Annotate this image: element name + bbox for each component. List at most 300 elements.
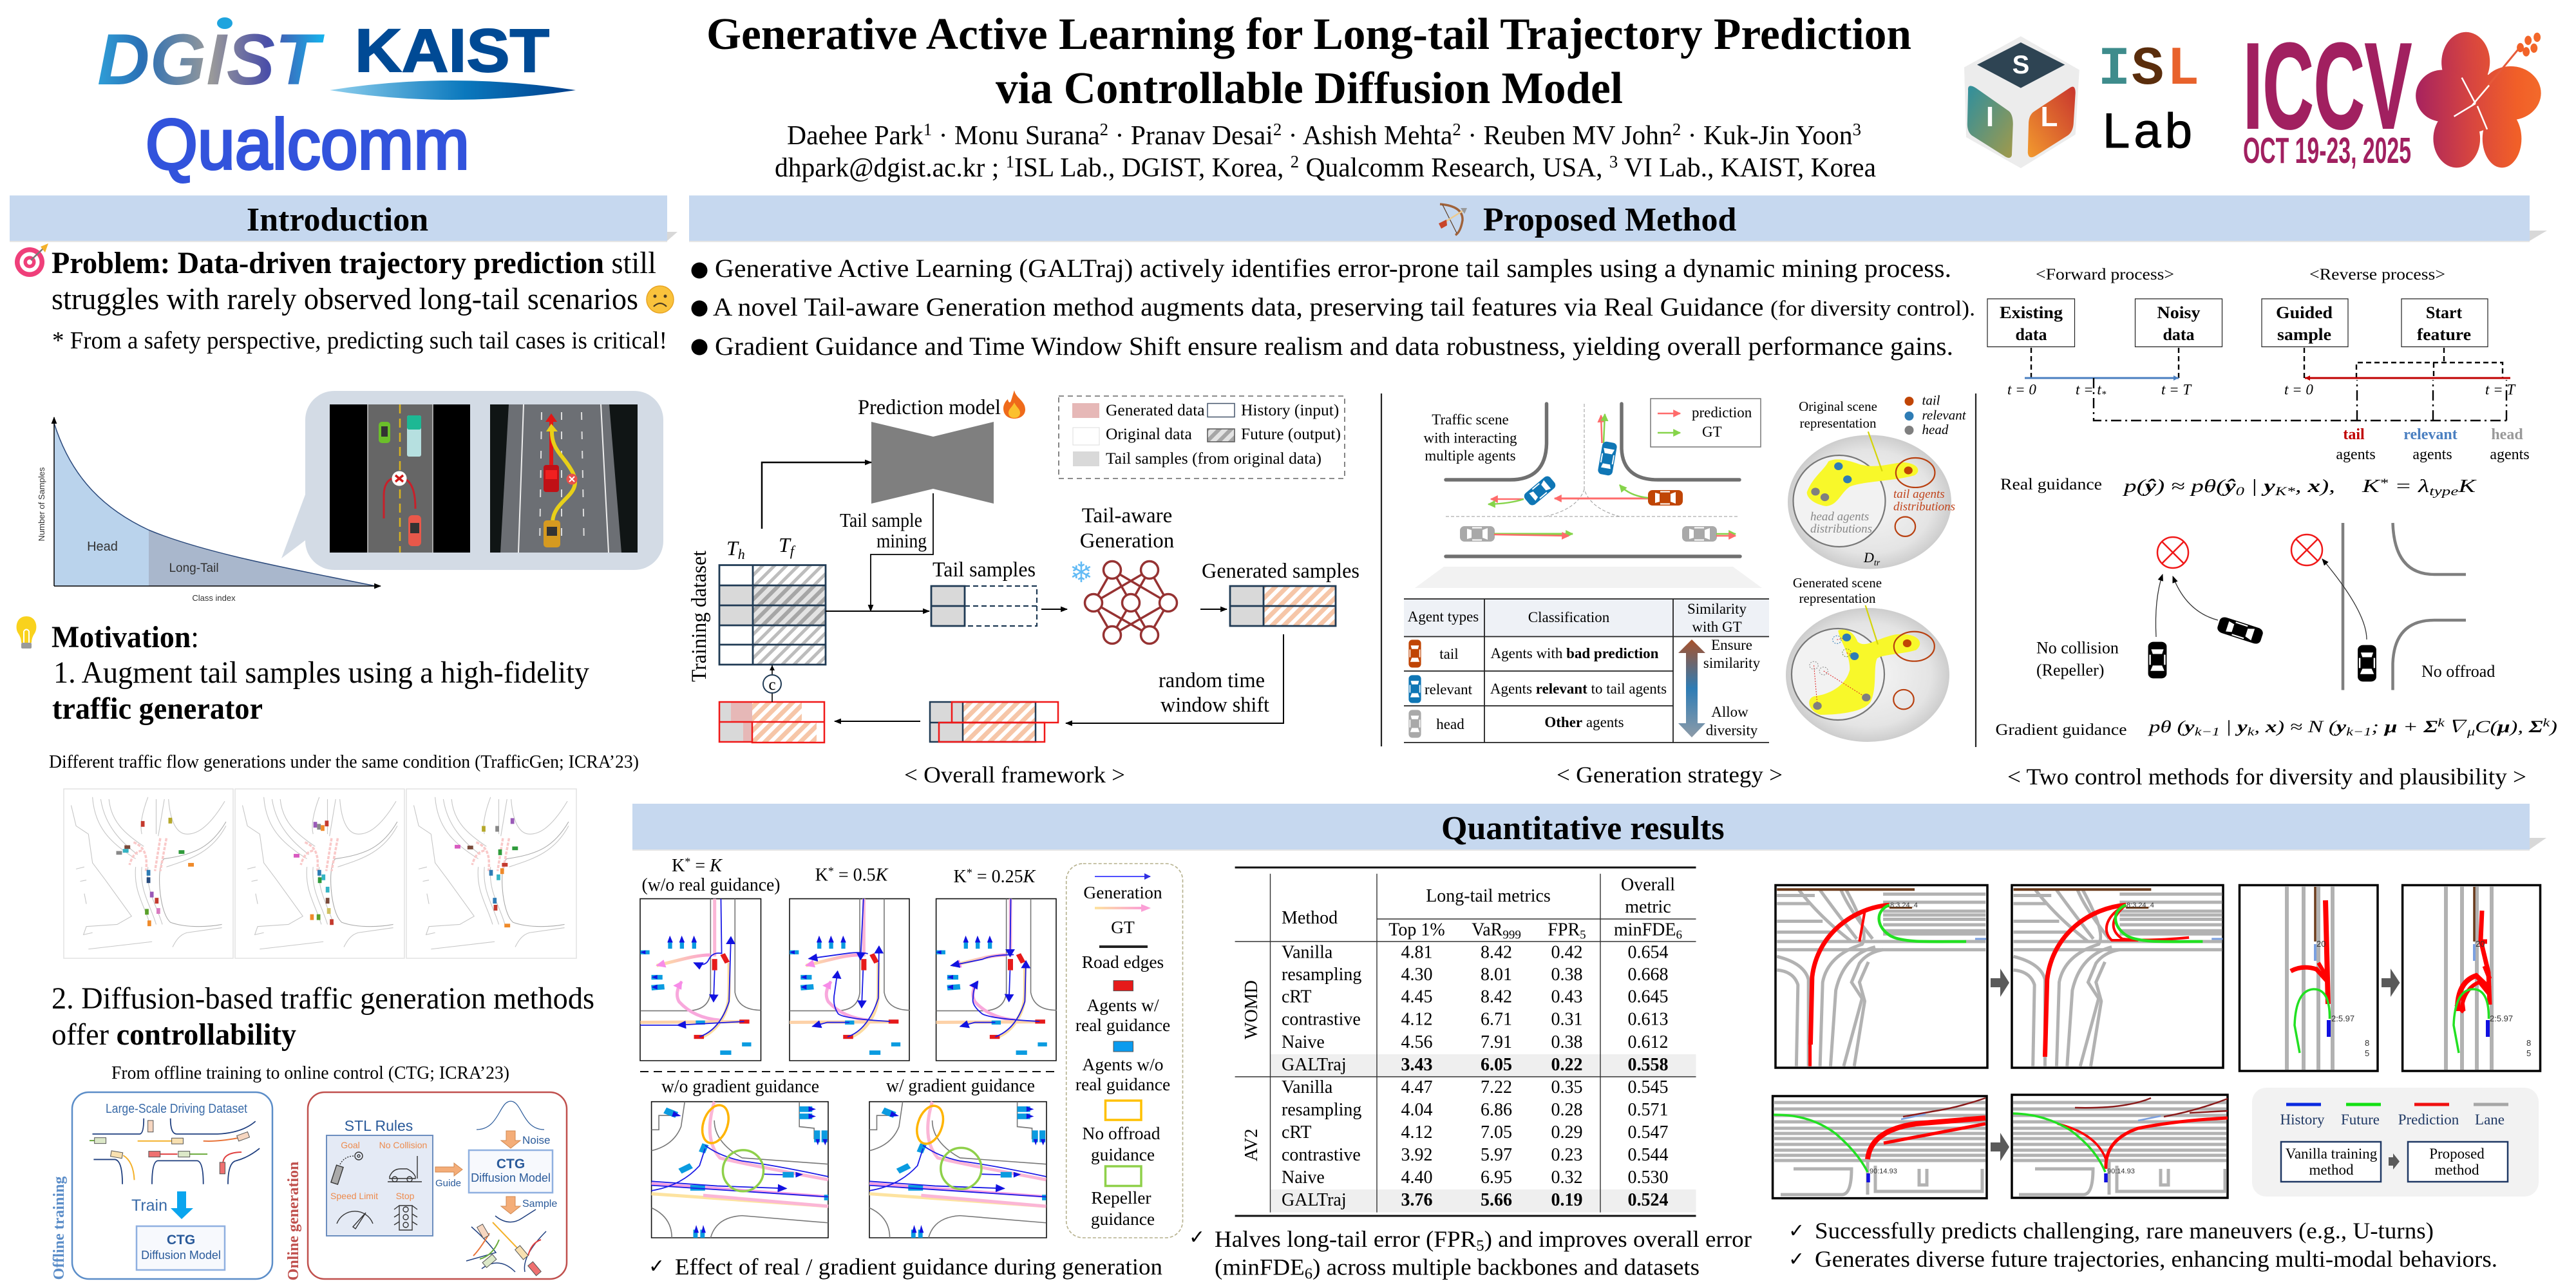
legend: prediction and GT <box>1651 399 1761 447</box>
scene representation: original: D <box>1864 549 1874 565</box>
icon: snowflake: ❄ <box>1070 556 1093 589</box>
legend: trajectory colours: Future <box>2341 1112 2380 1128</box>
table: agent types: Agent types <box>1408 609 1479 625</box>
forward and reverse process: Existing <box>2000 303 2063 322</box>
panel: scenario C vanilla <box>1773 1096 1987 1198</box>
table: quantitative metrics: 7.22 <box>1481 1077 1512 1097</box>
authors: · Pranav Desai <box>1108 121 1273 151</box>
panel: quantitative results <box>632 804 2546 1283</box>
table: quantitative metrics: 6.86 <box>1481 1100 1512 1120</box>
note: table summary: 6 <box>1305 1266 1312 1283</box>
real guidance: x), <box>2308 477 2331 497</box>
concatenated samples: c <box>768 676 776 694</box>
table: quantitative metrics: 0.32 <box>1551 1168 1583 1188</box>
table: quantitative metrics: 3.43 <box>1401 1055 1432 1075</box>
table: quantitative metrics: 4.47 <box>1401 1077 1432 1097</box>
legend: guidance figure: Repeller <box>1091 1188 1151 1208</box>
chart: long-tail distribution: Number of Samples <box>37 467 46 541</box>
legend: guidance figure: guidance <box>1091 1209 1155 1229</box>
table: quantitative metrics: 0.28 <box>1551 1100 1583 1120</box>
table: quantitative metrics: Overall <box>1621 875 1675 895</box>
table: agent types: Classification <box>1528 609 1610 625</box>
authors: 3 <box>1853 120 1861 139</box>
panel: scenario A vanilla <box>1776 885 1987 1068</box>
table: quantitative metrics: resampling <box>1282 1100 1361 1120</box>
summary bullets: Gradient Guidance and Time Window Shift ensure realism and data robustness, yielding overall performance gains. <box>715 332 1953 361</box>
authors: · Reuben MV John <box>1461 121 1672 151</box>
arrow: generator to generated samples <box>1200 609 1227 610</box>
figure: real guidance comparison: K <box>875 866 889 885</box>
table: quantitative metrics: 3.92 <box>1401 1145 1432 1165</box>
figure: real guidance comparison: w/ gradient guidance <box>886 1076 1035 1096</box>
forward and reverse process: t = 0 <box>2007 381 2036 398</box>
panel: scenario A proposed <box>2012 885 2223 1068</box>
table: agent types: Other agents <box>1544 714 1624 730</box>
table: quantitative metrics: 0.645 <box>1628 987 1668 1007</box>
arrow: random time window shift <box>1066 634 1283 723</box>
prediction model <box>858 396 1001 504</box>
legend: prediction and GT: GT <box>1702 424 1722 440</box>
diagram: online generation: Diffusion Model <box>471 1171 551 1184</box>
tail-aware generation network <box>1080 504 1177 644</box>
logo: ISL Lab: I <box>1986 101 1994 133</box>
forward and reverse process: tail <box>2343 426 2365 443</box>
panel: scenario B vanilla: 5 <box>2365 1048 2369 1058</box>
chart: long-tail distribution: Head <box>87 540 118 554</box>
training dataset table: h <box>738 546 745 562</box>
legend: trajectory colours: Vanilla training <box>2286 1146 2378 1162</box>
forward and reverse process: Start <box>2426 303 2462 322</box>
table: agent types: relevant <box>1425 681 1473 697</box>
summary bullets <box>692 254 1975 361</box>
table: quantitative metrics: contrastive <box>1282 1145 1361 1165</box>
panel: with gradient guidance <box>869 1102 1046 1238</box>
training dataset table: T <box>779 533 790 556</box>
diagram: online generation: No Collision <box>379 1140 427 1150</box>
scene representation: generated <box>1786 575 1949 742</box>
table: agent types: Agents with bad prediction <box>1491 645 1659 661</box>
figure: traffic flow generations <box>64 789 576 958</box>
label: tail sample mining: Tail sample <box>840 509 922 531</box>
motivation 1 text: 1. Augment tail samples using a high-fidelity <box>53 656 589 690</box>
table: quantitative metrics: 999 <box>1502 929 1521 942</box>
authors: · Kuk-Jin Yoon <box>1681 121 1853 151</box>
table: quantitative metrics: 0.38 <box>1551 1032 1583 1052</box>
logo: ISL Lab: L <box>2167 39 2199 100</box>
real guidance: | <box>2244 477 2264 497</box>
diagram: online generation: Speed Limit <box>330 1191 378 1201</box>
concatenated samples <box>719 665 824 743</box>
notes: qualitative results <box>1788 1218 2497 1272</box>
diagram: overall framework <box>688 390 1359 788</box>
table: quantitative metrics: 0.558 <box>1628 1055 1668 1075</box>
panel: scenario C vanilla: 90:14.93 <box>1870 1168 1897 1175</box>
affiliations: VI Lab., KAIST, Korea <box>1618 153 1876 183</box>
icon: fire <box>1003 390 1025 419</box>
diagram: offline training: Large-Scale Driving Dataset <box>106 1102 247 1116</box>
safety note: * From a safety perspective, predicting such tail cases is critical! <box>52 327 667 354</box>
logo: ISL Lab: S <box>2012 51 2029 79</box>
figure: real guidance comparison: (w/o real guidance) <box>641 875 781 895</box>
legend: guidance figure: Road edges <box>1082 952 1164 972</box>
real guidance: y <box>2261 477 2276 497</box>
table: quantitative metrics: GALTraj <box>1282 1055 1347 1075</box>
legend: guidance figure: Agents w/o <box>1082 1054 1164 1074</box>
table: agent types: Similarity <box>1687 601 1747 617</box>
forward and reverse process: <Forward process> <box>2036 266 2174 283</box>
panel: proposed method <box>688 196 2557 790</box>
forward and reverse process: Guided <box>2276 303 2333 322</box>
table: quantitative metrics: Naive <box>1282 1032 1325 1052</box>
real guidance: * <box>2380 477 2389 490</box>
figure: real guidance comparison: = <box>690 856 710 876</box>
panel: K star equals 0.5K <box>790 899 910 1061</box>
motivation 2 text <box>52 981 594 1052</box>
figure: real guidance comparison: K <box>709 856 723 876</box>
caption: overall framework: < Overall framework > <box>904 762 1125 788</box>
table: quantitative metrics: 0.23 <box>1551 1145 1583 1165</box>
callout: long-tail scenarios <box>281 391 663 570</box>
authors: · Monu Surana <box>932 121 1100 151</box>
diagram: online generation: Guide <box>435 1178 461 1189</box>
table: quantitative metrics: cRT <box>1282 987 1312 1007</box>
table: quantitative metrics: Naive <box>1282 1168 1325 1188</box>
table: quantitative metrics: GALTraj <box>1282 1190 1347 1210</box>
forward and reverse process: agents <box>2490 446 2530 463</box>
diagram: offline training: Offline training <box>51 1177 68 1280</box>
gradient guidance: C( <box>2475 717 2499 736</box>
legend: guidance figure: Generation <box>1083 882 1162 902</box>
table: agent types: with GT <box>1692 619 1742 635</box>
legend: data types: Tail samples (from original data) <box>1106 449 1321 468</box>
legend: data types <box>1059 396 1345 478</box>
gradient guidance: y <box>2235 717 2248 736</box>
figure: real guidance comparison: w/o gradient guidance <box>661 1077 819 1097</box>
no collision illustration: (Repeller) <box>2036 661 2104 679</box>
note: table summary: ) across multiple backbones and datasets <box>1312 1255 1700 1280</box>
motivation 1 text <box>52 656 589 726</box>
arrow: shifted to concat <box>835 721 920 722</box>
icon: target <box>15 243 48 277</box>
scene representation: original: tr <box>1874 558 1880 568</box>
logo: ISL Lab: Lab <box>2103 104 2192 158</box>
forward and reverse process: data <box>2163 325 2195 344</box>
table: quantitative metrics: WOMD <box>1242 980 1262 1039</box>
real guidance: K* <box>2274 485 2296 498</box>
real guidance: 0 <box>2236 485 2245 498</box>
table: quantitative metrics: 5.97 <box>1481 1145 1512 1165</box>
title: via Controllable Diffusion Model <box>996 64 1623 113</box>
table: quantitative metrics: 0.42 <box>1551 943 1583 962</box>
label: random time window shift: window shift <box>1160 694 1269 717</box>
authors: Daehee Park <box>787 121 924 151</box>
no offroad illustration <box>2291 523 2495 690</box>
table: quantitative metrics <box>1235 867 1696 1216</box>
traffic scene: multiple agents <box>1425 448 1516 464</box>
chart: long-tail distribution <box>37 417 381 603</box>
arrow: dataset to prediction model <box>762 462 871 529</box>
panel: scenario B vanilla: 8 <box>2365 1038 2369 1048</box>
legend: trajectory colours: Prediction <box>2398 1112 2459 1128</box>
scene representation: generated: representation <box>1799 591 1876 606</box>
diagram: offline training: Diffusion Model <box>141 1249 221 1262</box>
arrow: scenario C <box>1991 1133 2009 1161</box>
legend: guidance figure: real guidance <box>1075 1015 1170 1035</box>
generated samples: Generated samples <box>1202 560 1359 583</box>
gradient guidance: μ <box>2467 725 2475 738</box>
table: quantitative metrics: 5 <box>1580 929 1586 942</box>
logo: ISL Lab: S <box>2132 39 2164 100</box>
heading: quantitative results <box>632 804 2546 851</box>
table: quantitative metrics: 4.81 <box>1401 943 1432 962</box>
table: quantitative metrics: 8.42 <box>1481 987 1512 1007</box>
diagram: online generation: STL Rules <box>345 1117 413 1134</box>
table: quantitative metrics: 4.12 <box>1401 1010 1432 1029</box>
scenario: u-turn <box>330 404 470 553</box>
separator right <box>1975 393 1976 747</box>
legend: data types: Future (output) <box>1241 424 1341 443</box>
scene representation: original: distributions <box>1893 500 1955 514</box>
table: quantitative metrics: 6.95 <box>1481 1168 1512 1188</box>
gradient guidance: Gradient guidance <box>1995 721 2126 739</box>
panel: scenario B proposed: 5 <box>2526 1048 2531 1058</box>
real guidance: , <box>2295 477 2308 497</box>
legend: prediction and GT: prediction <box>1692 404 1752 421</box>
table: quantitative metrics: 0.43 <box>1551 987 1583 1007</box>
figure: real guidance comparison: K <box>954 867 967 887</box>
diagram: online generation: Online generation <box>285 1162 302 1280</box>
figure: real guidance comparison: K <box>672 856 685 876</box>
table: quantitative metrics: 0.613 <box>1628 1010 1668 1029</box>
gradient guidance: ) <box>2548 717 2557 736</box>
figure: real guidance comparison: K <box>1023 867 1036 887</box>
panel: scenario A vanilla: 8:3.24 .4 <box>1890 902 1918 909</box>
table: quantitative metrics: Top 1% <box>1388 920 1445 940</box>
arrow: scenario B <box>2382 969 2400 997</box>
table: quantitative metrics: 0.38 <box>1551 965 1583 985</box>
label: random time window shift: random time <box>1159 669 1265 692</box>
training dataset table: Training dataset <box>688 551 711 682</box>
real guidance: type <box>2429 485 2458 498</box>
forward and reverse process: data <box>2015 325 2047 344</box>
panel: scenario B vanilla <box>2240 885 2378 1071</box>
diagram: online generation: Noise <box>522 1134 550 1146</box>
table: quantitative metrics: metric <box>1625 897 1671 917</box>
panel: scenario C proposed <box>2012 1095 2228 1198</box>
table: quantitative metrics: 8.42 <box>1481 943 1512 962</box>
gradient guidance: , <box>2254 717 2266 736</box>
real guidance: Real guidance <box>2000 476 2102 493</box>
traffic scene <box>1415 404 1762 588</box>
logo: ISL Lab: I <box>2098 39 2130 100</box>
scene representation: original: tail agents <box>1893 488 1945 501</box>
figure: real guidance comparison: = 0.25 <box>972 867 1023 887</box>
scene representation: original: Original scene <box>1799 399 1877 414</box>
forward and reverse process: t = T <box>2485 381 2516 398</box>
heading: quantitative results: Quantitative results <box>1441 810 1725 847</box>
arrow: scenario A <box>1991 969 2009 997</box>
legend: trajectory colours <box>2252 1088 2539 1197</box>
caption: CTG: From offline training to online control (CTG; ICRA’23) <box>111 1063 509 1083</box>
table: quantitative metrics: cRT <box>1282 1122 1312 1142</box>
table: quantitative metrics: 0.545 <box>1628 1077 1668 1097</box>
notes: qualitative results: ✓ <box>1788 1248 1804 1271</box>
panel: scenario B proposed: 2:5.97 <box>2490 1014 2513 1023</box>
notes: qualitative results: Generates diverse future trajectories, enhancing multi-modal behaviors. <box>1815 1246 2497 1272</box>
scene representation: generated: Generated scene <box>1793 575 1882 591</box>
note: table summary: Halves long-tail error (FPR <box>1215 1226 1469 1252</box>
authors: 2 <box>1273 120 1282 139</box>
logo: ISL Lab <box>1964 36 2199 168</box>
notes: qualitative results: Successfully predicts challenging, rare maneuvers (e.g., U-turns) <box>1815 1218 2434 1244</box>
gradient guidance: k <box>2543 716 2551 729</box>
traffic scene: Traffic scene <box>1432 412 1509 428</box>
motivation 2 text: offer controllability <box>52 1018 296 1052</box>
diagram: online generation: CTG <box>497 1157 525 1171</box>
table: agent types: Allow <box>1711 704 1748 720</box>
panel: scenario B proposed: 8 <box>2526 1038 2531 1048</box>
table: agent types <box>1404 599 1769 743</box>
gradient guidance: k−1 <box>2346 725 2371 738</box>
table: quantitative metrics: 4.40 <box>1401 1168 1432 1188</box>
problem statement: Problem: Data-driven trajectory prediction still <box>52 246 656 280</box>
problem statement: struggles with rarely observed long-tail scenarios <box>52 282 638 316</box>
arrow: tail sample mining <box>871 493 933 611</box>
panel: scenario B proposed: 20 <box>2476 939 2485 949</box>
table: quantitative metrics: 5.66 <box>1481 1190 1512 1210</box>
legend: guidance figure <box>1066 864 1182 1238</box>
affiliations: 3 <box>1609 152 1618 171</box>
heading: introduction <box>10 196 677 242</box>
table: quantitative metrics: 6 <box>1676 929 1682 942</box>
motivation 1 text: traffic generator <box>52 692 263 726</box>
heading: introduction: Introduction <box>247 202 428 238</box>
summary bullets: Generative Active Learning (GALTraj) actively identifies error-prone tail samples using a dynamic mining process. <box>715 254 1951 283</box>
authors: 1 <box>923 120 932 139</box>
diagram: offline training: CTG <box>167 1233 195 1247</box>
arrow: tail samples to generator <box>1041 609 1067 610</box>
note: table summary: 5 <box>1476 1238 1484 1255</box>
authors: 2 <box>1672 120 1681 139</box>
scene representation: original: distributions <box>1810 522 1872 536</box>
gradient guidance: k−1 <box>2195 725 2220 738</box>
forward and reverse process: sample <box>2277 325 2331 344</box>
scene representation: original <box>1788 393 1967 569</box>
gradient guidance: μ + Σ <box>2385 717 2434 736</box>
logo: Qualcomm: Qualcomm <box>146 105 469 184</box>
table: quantitative metrics: 0.22 <box>1551 1055 1583 1075</box>
table: quantitative metrics: 0.524 <box>1628 1190 1668 1210</box>
table: quantitative metrics: 4.04 <box>1401 1100 1432 1120</box>
panel: K star equals 0.25K <box>936 899 1057 1061</box>
logo: ICCV 2025: ICCV <box>2243 18 2412 155</box>
label: random time window shift <box>1159 669 1269 717</box>
note: table summary: (minFDE <box>1215 1255 1302 1280</box>
legend: trajectory colours: Lane <box>2475 1112 2505 1128</box>
forward and reverse process: <Reverse process> <box>2309 266 2445 283</box>
tail samples <box>931 558 1037 626</box>
table: agent types: Ensure <box>1711 637 1752 653</box>
forward and reverse process: t = T <box>2161 381 2192 398</box>
legend: trajectory colours: Proposed <box>2429 1146 2485 1162</box>
separator left <box>1381 393 1382 746</box>
icon: light bulb <box>17 616 36 649</box>
table: quantitative metrics: 4.45 <box>1401 987 1432 1007</box>
real guidance <box>2000 476 2477 498</box>
table: quantitative metrics: 0.547 <box>1628 1122 1668 1142</box>
scene representation: original: tail <box>1922 393 1940 408</box>
icon: bow and arrow <box>1439 204 1467 235</box>
real guidance: = λ <box>2388 477 2429 497</box>
problem statement <box>52 246 656 316</box>
label: tail sample mining <box>840 509 927 552</box>
tail-aware generation network: Generation <box>1080 529 1174 553</box>
table: agent types: head <box>1436 716 1464 732</box>
summary bullets: A novel Tail-aware Generation method augments data, preserving tail features via Real Guidance (for diversity control). <box>713 292 1975 321</box>
legend: data types: History (input) <box>1241 401 1339 419</box>
scenario: lane change <box>490 404 638 553</box>
real guidance: K <box>2458 477 2477 497</box>
tail-aware generation network: Tail-aware <box>1082 504 1172 527</box>
training dataset table: f <box>790 543 796 559</box>
panel: scenario C proposed: 90:14.93 <box>2107 1168 2135 1175</box>
table: quantitative metrics: AV2 <box>1242 1129 1262 1161</box>
panel: scenario B proposed <box>2403 885 2540 1071</box>
affiliations: dhpark@dgist.ac.kr ; <box>775 153 1001 183</box>
authors: · Ashish Mehta <box>1282 121 1453 151</box>
gradient guidance: k <box>2248 725 2255 738</box>
table: quantitative metrics: 0.35 <box>1551 1077 1583 1097</box>
no offroad illustration: No offroad <box>2421 662 2495 681</box>
forward and reverse process: head <box>2491 426 2523 443</box>
table: quantitative metrics: Vanilla <box>1282 1077 1333 1097</box>
diagram: offline training: Train <box>131 1197 167 1215</box>
affiliations: 2 <box>1291 152 1299 171</box>
table: quantitative metrics: VaR <box>1472 920 1502 940</box>
authors: 2 <box>1452 120 1461 139</box>
table: quantitative metrics: Long-tail metrics <box>1426 886 1551 906</box>
gradient guidance <box>1995 716 2557 739</box>
figure: qualitative trajectories <box>1773 885 2540 1198</box>
legend: data types: Original data <box>1106 424 1192 443</box>
arrow: dataset to tail samples <box>826 611 929 612</box>
figure: real guidance comparison: * <box>967 866 972 879</box>
table: agent types: tail <box>1439 646 1459 662</box>
logo: KAIST <box>330 17 576 100</box>
table: quantitative metrics: 0.612 <box>1628 1032 1668 1052</box>
scene representation: original: head agents <box>1810 510 1869 524</box>
legend: guidance figure: guidance <box>1091 1144 1155 1164</box>
table: agent types: similarity <box>1703 655 1761 671</box>
prediction model: Prediction model <box>858 396 1001 419</box>
heading: proposed method: Proposed Method <box>1483 202 1736 238</box>
panel: scenario B vanilla: 2:5.97 <box>2331 1014 2354 1023</box>
table: quantitative metrics: 4.12 <box>1401 1122 1432 1142</box>
table: quantitative metrics: 4.56 <box>1401 1032 1432 1052</box>
logo: ISL Lab: L <box>2041 101 2058 133</box>
diagram: online generation: Sample <box>522 1198 557 1209</box>
table: quantitative metrics: 0.530 <box>1628 1168 1668 1188</box>
diagram: online generation <box>285 1092 567 1280</box>
legend: trajectory colours: method <box>2309 1162 2354 1178</box>
logo: DGIST: DGIST <box>97 19 325 100</box>
forward and reverse process: * <box>2101 389 2107 399</box>
caption: two control methods: < Two control methods for diversity and plausibility > <box>2007 764 2526 790</box>
note: effect of guidance: ✓ <box>649 1255 665 1278</box>
legend: guidance figure: No offroad <box>1083 1123 1160 1143</box>
table: agent types: diversity <box>1706 723 1758 738</box>
traffic scene: with interacting <box>1423 430 1517 446</box>
